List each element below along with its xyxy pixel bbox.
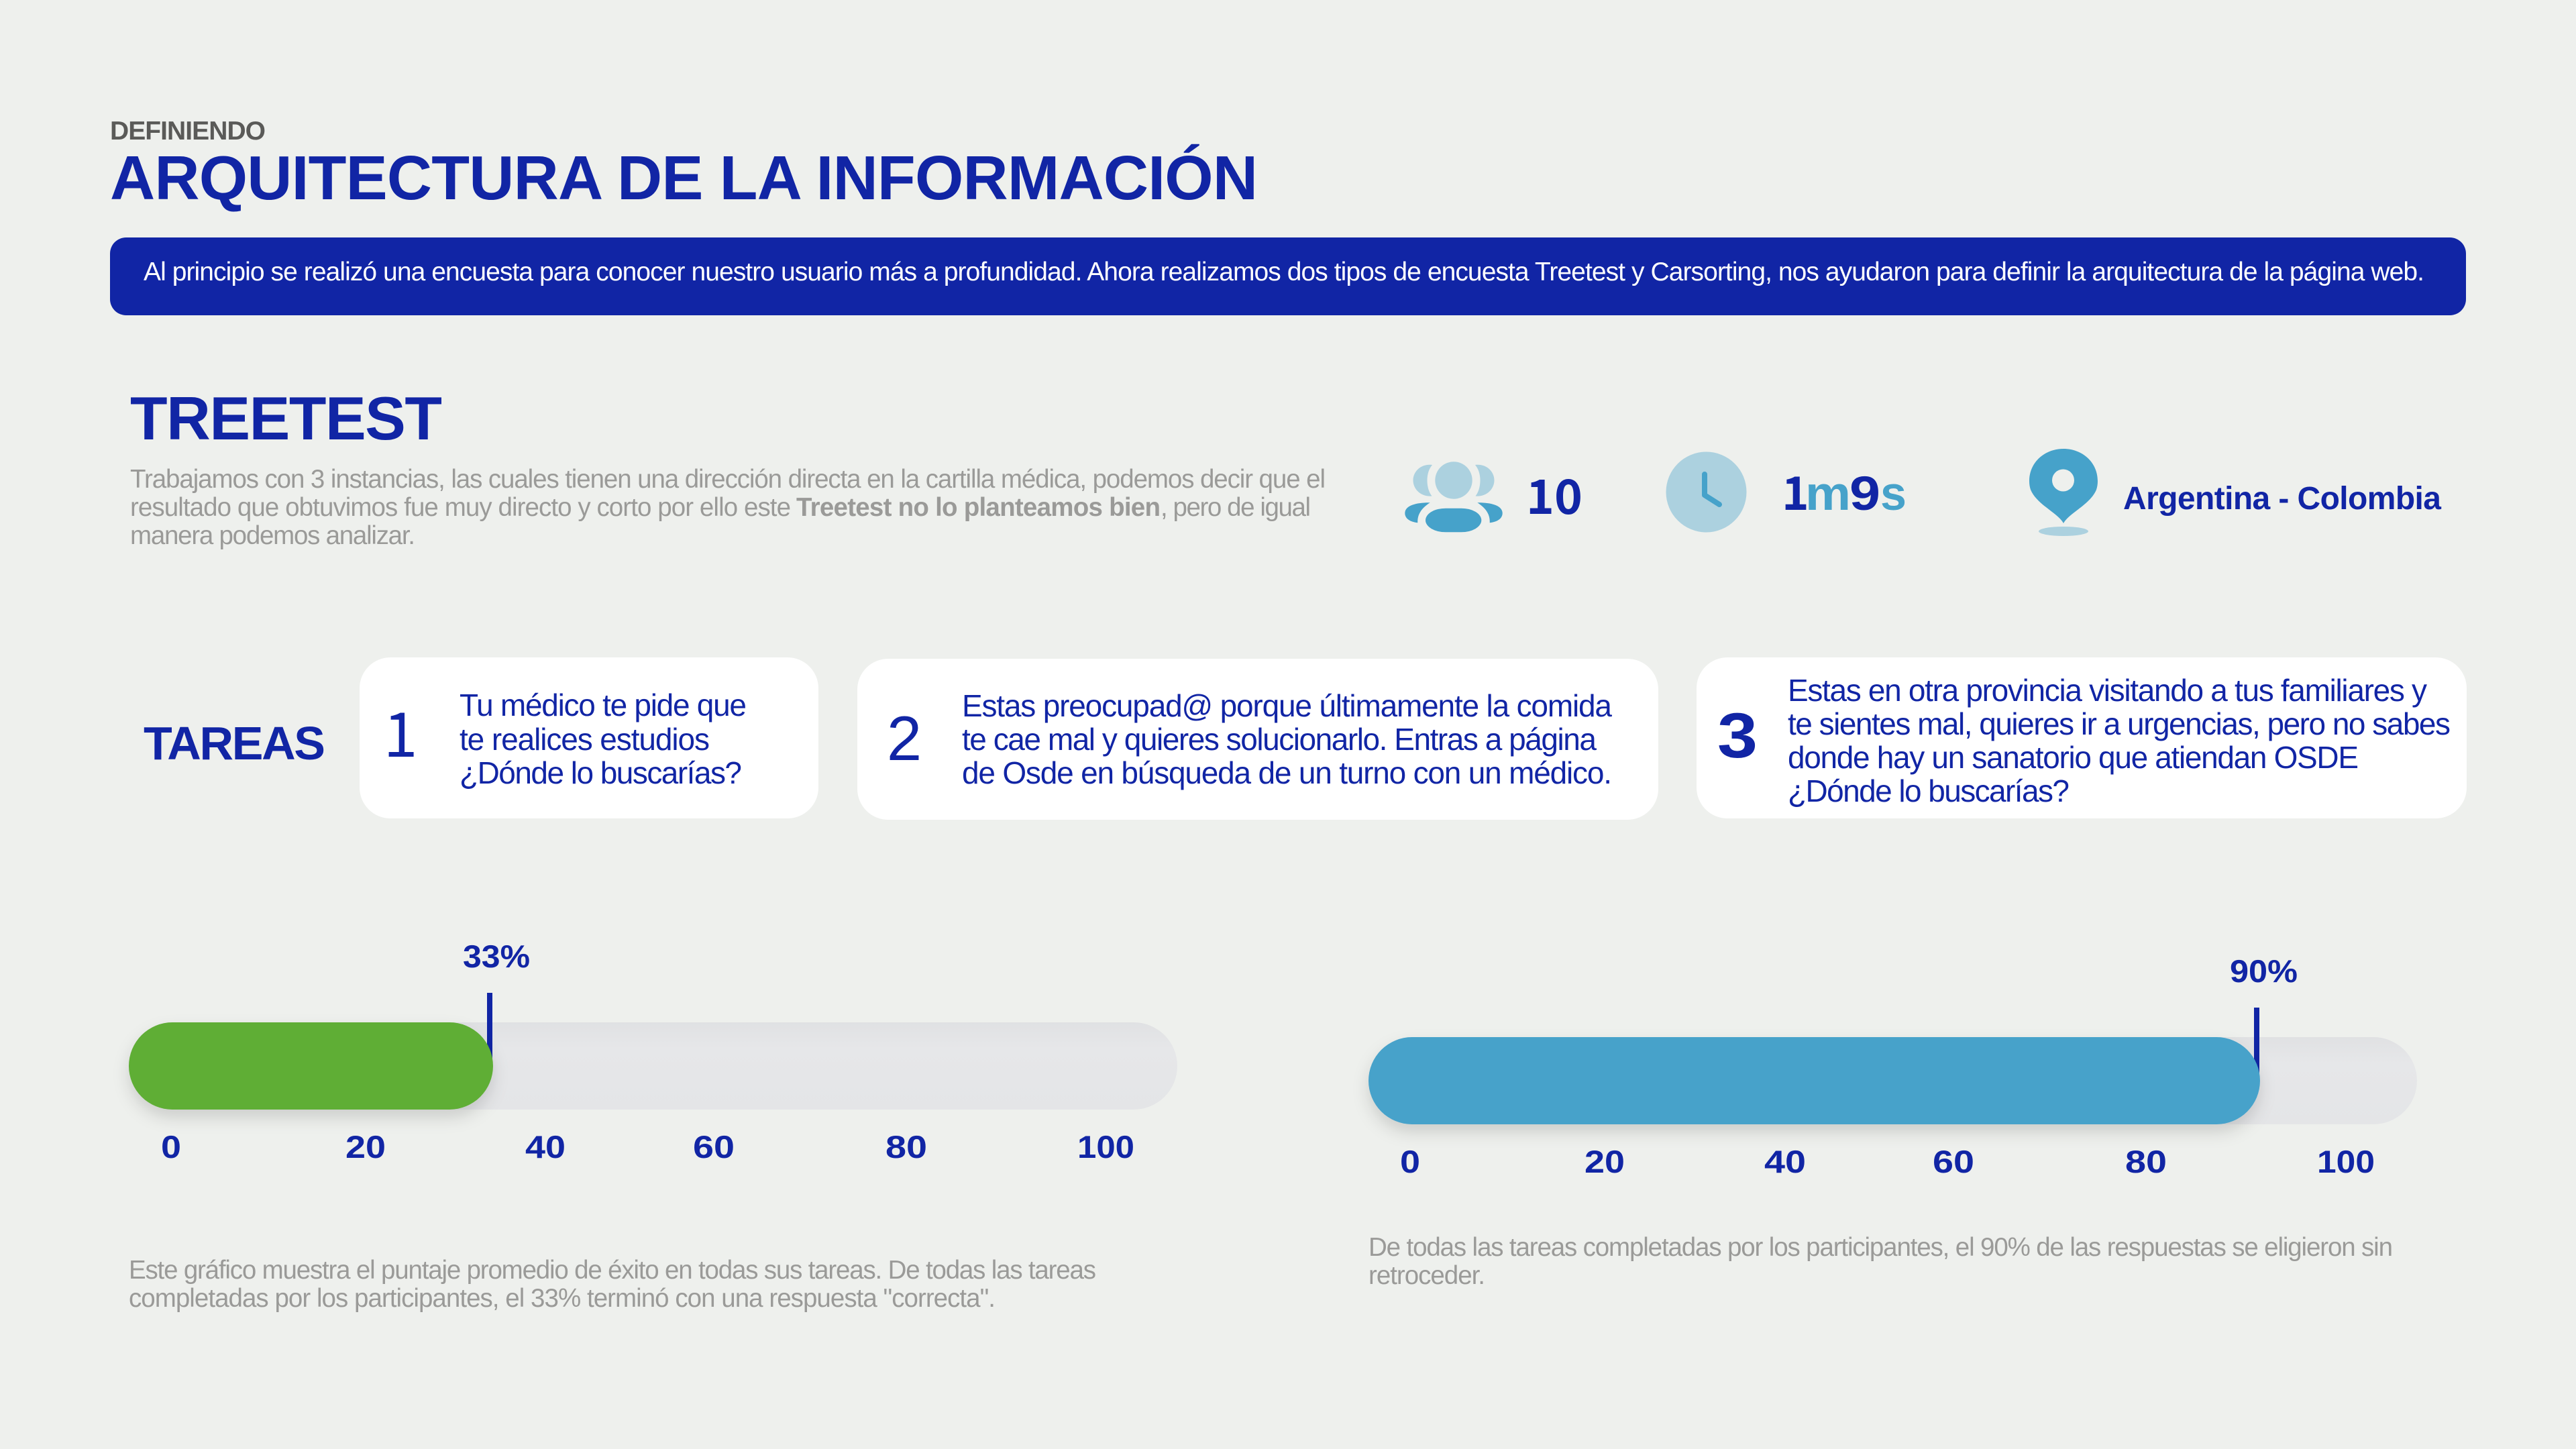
axis labels: 20 [345,1129,386,1165]
icon: map pin [2029,449,2098,536]
value: 1m9s [1782,456,1907,523]
value: 1m9s: 9 [1849,468,1880,521]
text block: chart 2 note: De todas las tareas completadas por los participantes, el 90% de las respuestas se eligieron sin [1368,1233,2393,1262]
axis labels: 100 [2317,1144,2375,1179]
card: task 3: Estas en otra provincia visitando a tus familiares y [1788,673,2427,708]
text block: treetest description: Treetest no lo planteamos bien [796,493,1161,522]
stat: participants [1405,460,1582,532]
text block: treetest description: Trabajamos con 3 instancias, las cuales tienen una dirección directa en la cartilla médica, podemos decir que el [130,465,1326,494]
value label: 33% [463,938,530,974]
value: 1m9s: s [1880,468,1907,521]
axis labels: 60 [693,1129,735,1165]
card: task 3 [1697,657,2467,818]
bar fill [129,1022,493,1110]
card: task 2: Estas preocupad@ porque últimamente la comida [962,688,1612,723]
card: task 1: 1 [383,686,418,775]
chart: success score 33% [129,938,1177,1165]
axis labels: 80 [2125,1144,2167,1179]
card: task 3: te sientes mal, quieres ir a urgencias, pero no sabes [1788,706,2451,741]
bar fill [1368,1037,2260,1124]
title: ARQUITECTURA DE LA INFORMACIÓN [110,143,1258,213]
axis labels: 0 [1400,1144,1420,1179]
banner: intro [110,237,2466,315]
text block: treetest description: resultado que obtuvimos fue muy directo y corto por ello este [130,493,791,522]
text block: chart 1 note [129,1256,1096,1313]
stat: location: Argentina - Colombia [2123,481,2441,517]
axis labels [161,1129,1134,1165]
text block: treetest description: manera podemos analizar. [130,521,415,550]
axis labels: 40 [525,1129,566,1165]
card: task 1: te realices estudios [460,722,710,757]
card: task 3: 3 [1717,700,1758,771]
icon: people [1405,462,1503,532]
eyebrow: definiendo: DEFINIENDO [110,117,266,146]
value: 1m9s: 1 [1782,456,1809,523]
card: task 2 [857,659,1658,820]
stat: duration [1666,452,1907,533]
chart: no-backtrack 90% [1368,953,2417,1179]
text block: chart 1 note: completadas por los participantes, el 33% terminó con una respuesta "correcta". [129,1284,996,1313]
card: task 2: de Osde en búsqueda de un turno con un médico. [962,755,1612,790]
card: task 2: te cae mal y quieres solucionarlo. Entras a página [962,722,1597,757]
bar track [1368,1037,2417,1124]
card: task 3: ¿Dónde lo buscarías? [1788,773,2070,808]
card: task 1: ¿Dónde lo buscarías? [460,755,742,790]
text block: chart 1 note: Este gráfico muestra el puntaje promedio de éxito en todas sus tareas. De todas las tareas [129,1256,1096,1285]
marker line [487,993,492,1060]
value: 1m9s: m [1805,468,1851,521]
axis labels [1400,1144,2375,1179]
stat: location [2029,449,2441,536]
value label: 90% [2230,953,2298,989]
text block: chart 2 note [1368,1233,2393,1290]
heading: tareas: TAREAS [144,717,325,769]
card: task 1 [360,657,818,818]
text block: treetest description [130,465,1326,550]
axis labels: 100 [1077,1129,1134,1165]
card: task 1: Tu médico te pide que [460,688,747,722]
text block: treetest description: , pero de igual [1161,493,1311,522]
marker line [2254,1008,2259,1075]
axis labels: 60 [1933,1144,1974,1179]
axis labels: 0 [161,1129,181,1165]
card: task 3: donde hay un sanatorio que atiendan OSDE [1788,740,2359,775]
card: task 2: 2 [887,703,922,773]
heading: treetest: TREETEST [130,385,442,453]
stat: participants: 10 [1526,460,1582,528]
banner: intro: Al principio se realizó una encuesta para conocer nuestro usuario más a profundidad. Ahora realizamos dos tipos de encuesta Treetest y Carsorting, nos ayudaron para definir la arquitectura de la página web. [144,258,2424,286]
text block: chart 2 note: retroceder. [1368,1261,1485,1290]
bar track [129,1022,1177,1110]
axis labels: 80 [885,1129,927,1165]
axis labels: 40 [1764,1144,1806,1179]
axis labels: 20 [1585,1144,1625,1179]
icon: clock [1666,452,1747,533]
